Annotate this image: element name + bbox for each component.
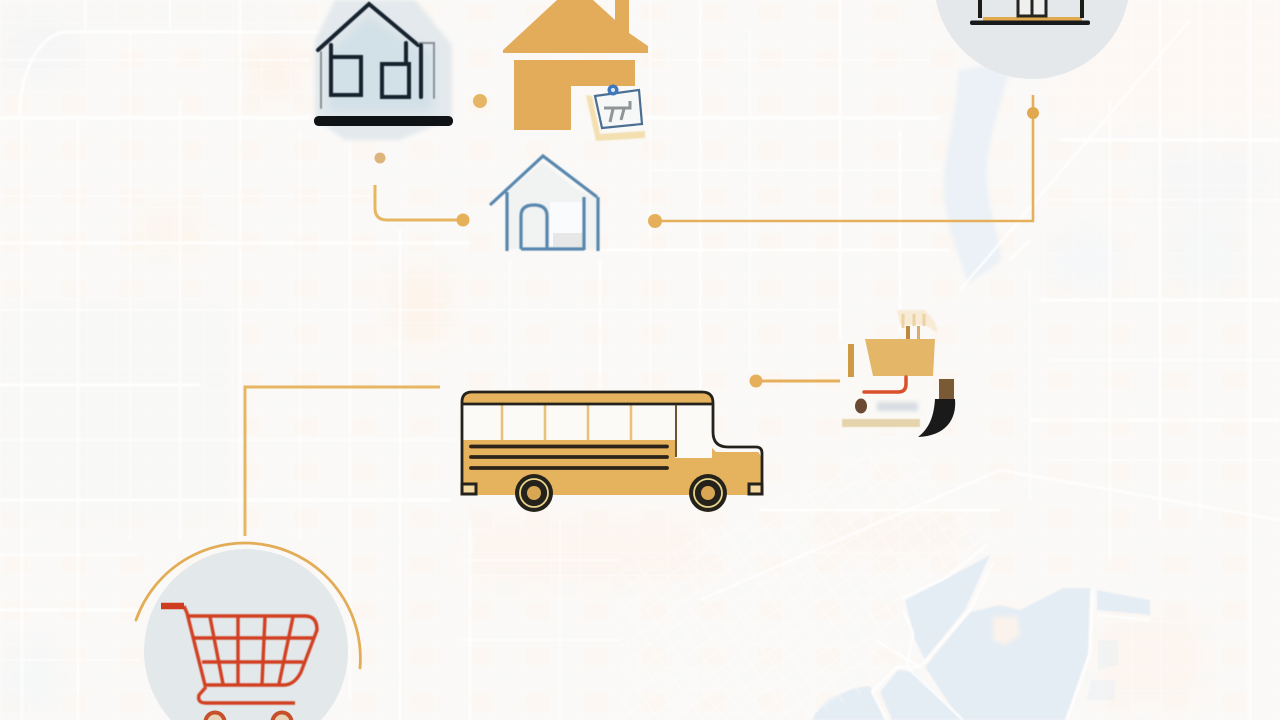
icon: shopping cart in circle bbox=[136, 543, 360, 720]
connector: cart to bus bbox=[245, 387, 440, 536]
wheels bbox=[515, 474, 727, 512]
connector: dot between houses bbox=[473, 94, 487, 108]
front and rear bumpers bbox=[462, 484, 762, 494]
bay water bbox=[812, 555, 1150, 720]
icon: solid gold house bbox=[503, 0, 648, 141]
building base bbox=[970, 0, 1090, 25]
connector: bus to parcel icon bbox=[750, 374, 840, 388]
river bbox=[944, 62, 1012, 284]
icon: black outline house bbox=[314, 0, 453, 140]
connector: blue house to top-right circle bbox=[648, 95, 1039, 228]
icon: pinned note with animal sketch bbox=[586, 84, 645, 141]
cart bbox=[184, 606, 317, 703]
icon: blue outline house bbox=[490, 156, 598, 251]
connector: dot to house dashed L line bbox=[374, 152, 470, 226]
icon: school bus bbox=[462, 392, 762, 512]
icon: parcel and delivery fragments bbox=[842, 310, 955, 437]
icon: top-right circle with building bbox=[934, 0, 1130, 79]
cart wheels bbox=[206, 712, 292, 720]
